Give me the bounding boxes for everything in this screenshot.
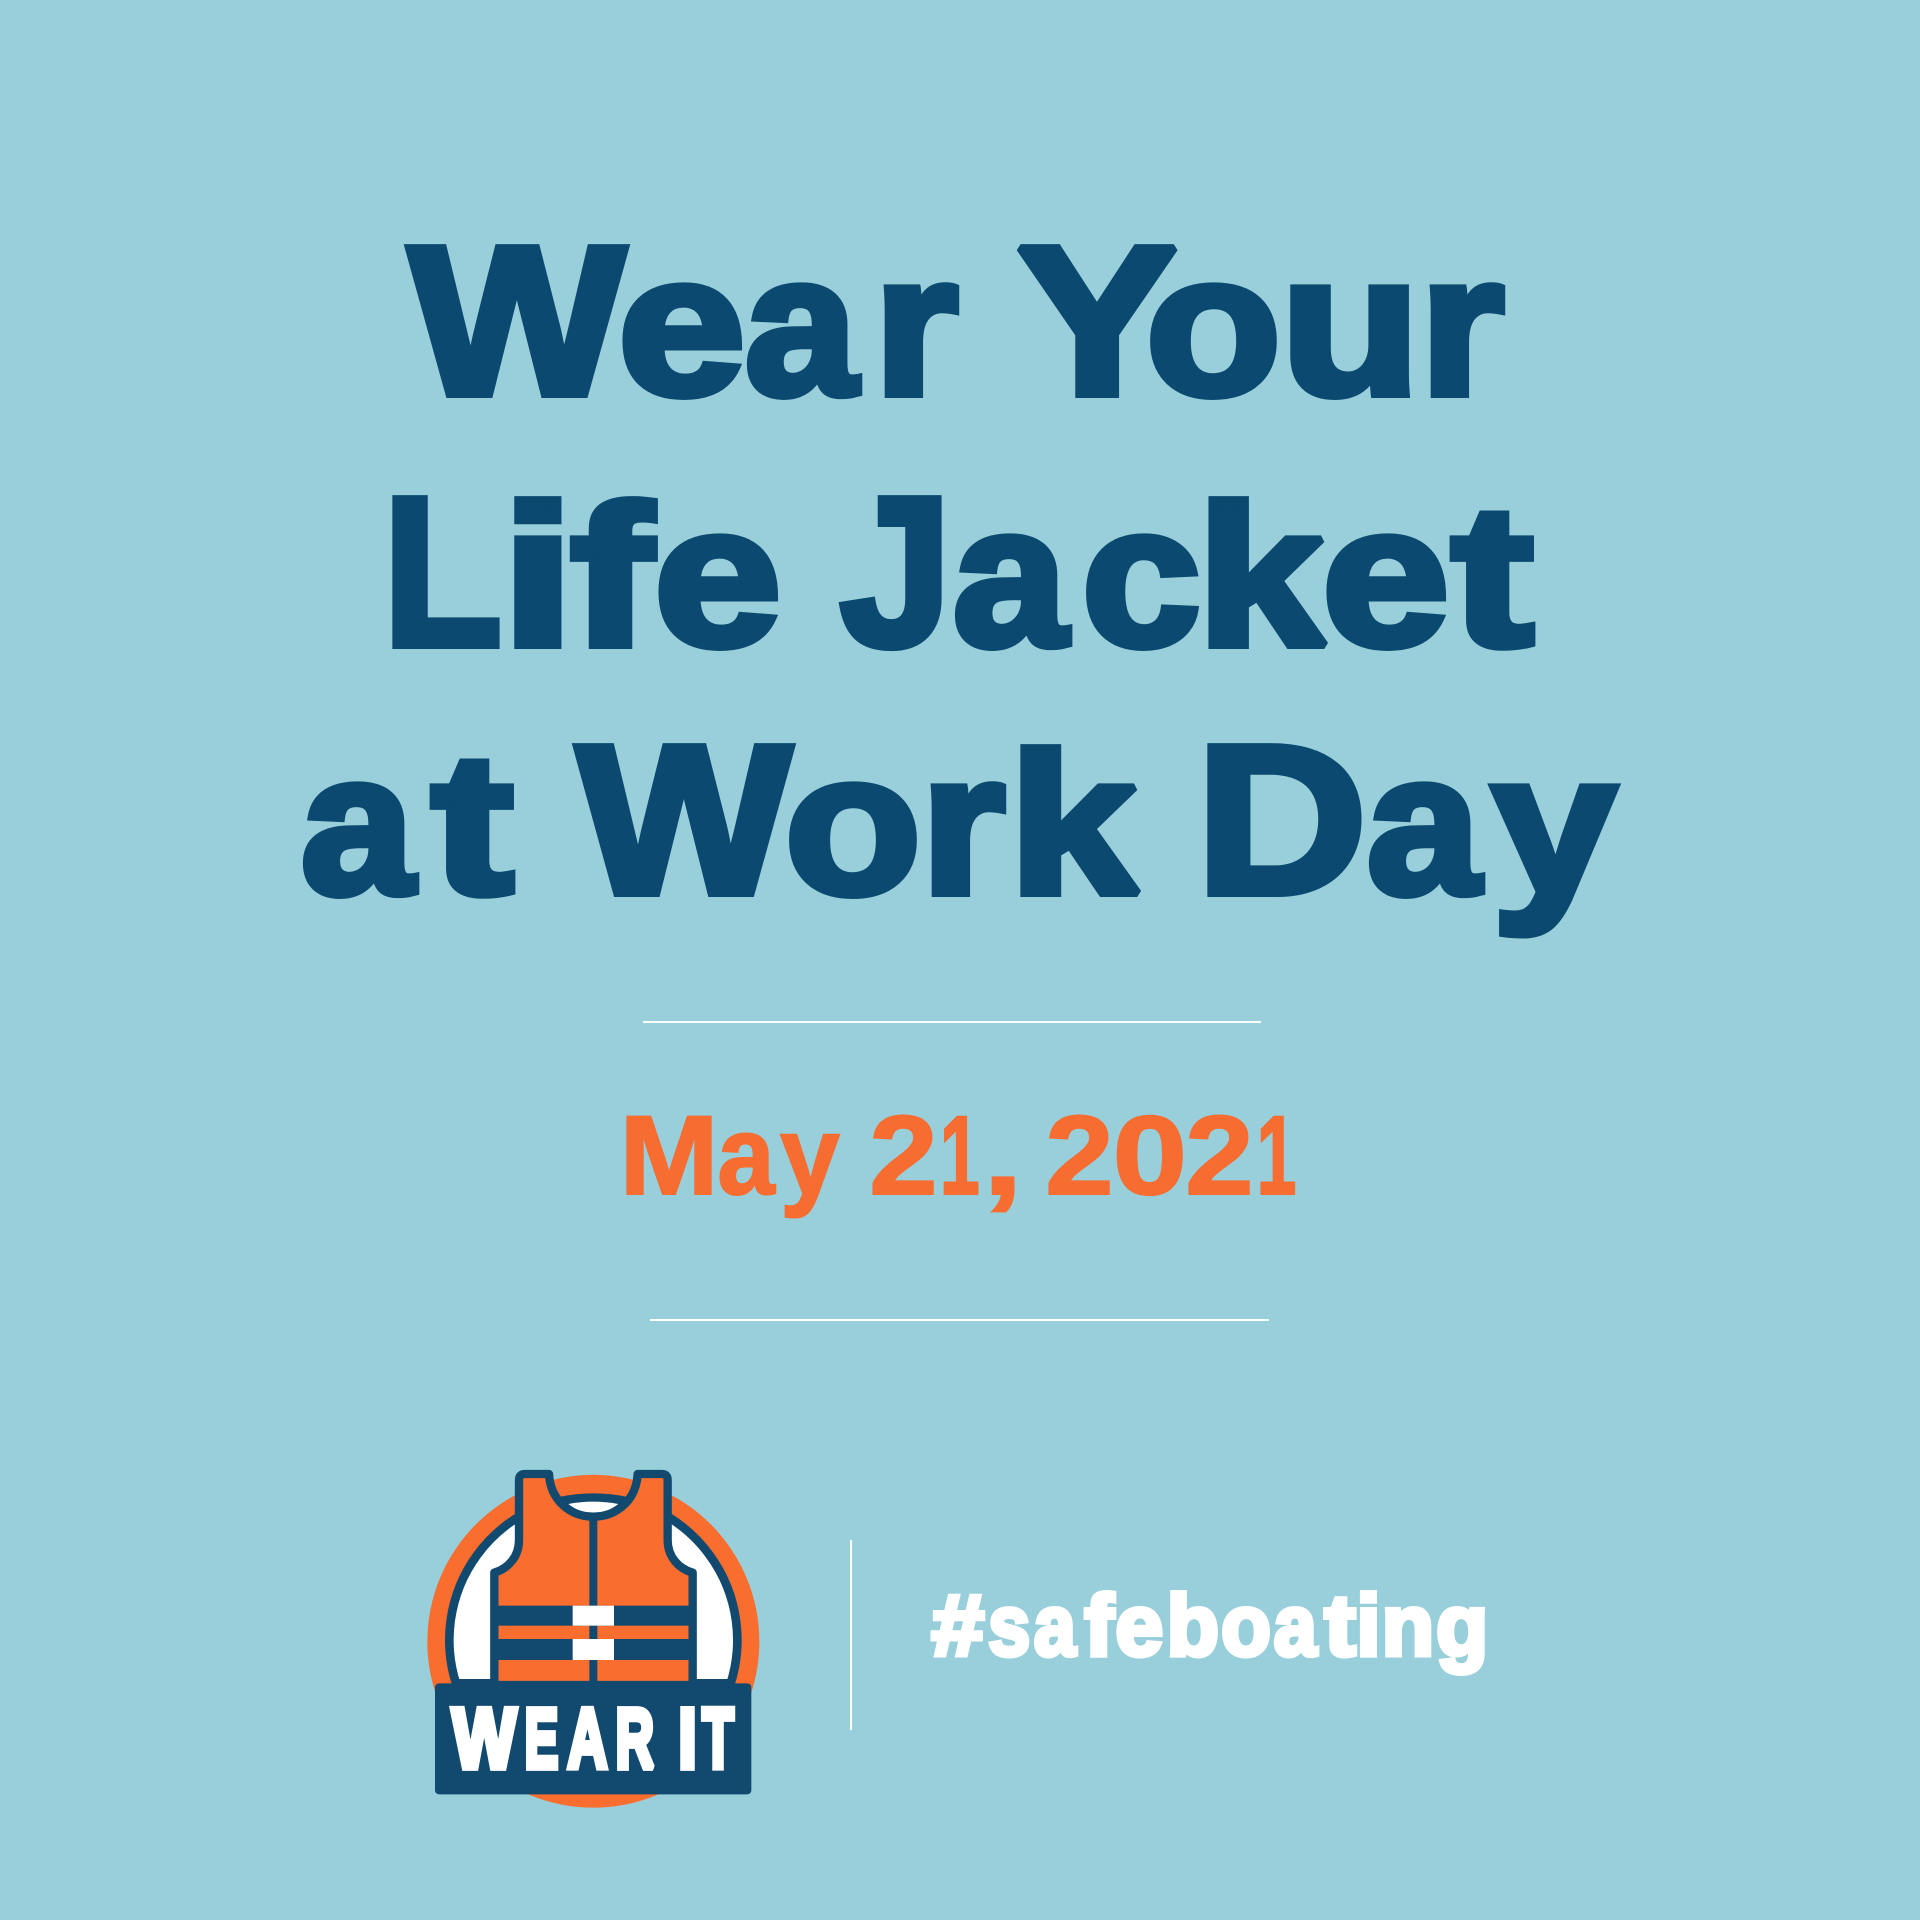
title: i xyxy=(501,465,575,688)
banner text: I xyxy=(678,1692,696,1786)
title xyxy=(301,202,1616,938)
title: a xyxy=(301,713,416,936)
logo: wear it life jacket badge xyxy=(427,1474,759,1808)
banner text: E xyxy=(525,1692,558,1786)
orange behind neck xyxy=(550,1475,637,1507)
title: J xyxy=(840,453,952,690)
title: t xyxy=(1452,465,1534,688)
title: r xyxy=(921,713,1005,936)
title: f xyxy=(570,465,653,688)
title: D xyxy=(1196,701,1367,938)
neck opening xyxy=(568,1502,618,1513)
date: 2 xyxy=(1045,1093,1114,1218)
title: L xyxy=(383,453,502,690)
hashtag: g xyxy=(1436,1578,1488,1674)
title: e xyxy=(654,465,781,688)
white buckles xyxy=(573,1606,614,1660)
hashtag: i xyxy=(1356,1578,1381,1674)
banner text: R xyxy=(616,1692,654,1786)
title: Y xyxy=(1016,202,1178,439)
date: , xyxy=(983,1093,1023,1218)
title: u xyxy=(1281,214,1420,437)
hashtag: o xyxy=(1221,1578,1271,1674)
title: r xyxy=(874,214,958,437)
date: 0 xyxy=(1113,1093,1187,1218)
date: a xyxy=(717,1093,775,1218)
title: o xyxy=(785,713,921,936)
title: r xyxy=(1420,214,1504,437)
banner text: T xyxy=(702,1692,734,1786)
title: a xyxy=(745,214,859,437)
hashtag: a xyxy=(1274,1578,1318,1674)
date: 2 xyxy=(869,1093,938,1218)
title: e xyxy=(618,214,745,437)
neck collar xyxy=(557,1493,630,1518)
navy straps xyxy=(497,1606,690,1660)
banner text: W xyxy=(452,1692,517,1786)
vest body xyxy=(494,1474,693,1685)
hashtag: # xyxy=(932,1578,984,1674)
hashtag: b xyxy=(1167,1578,1219,1674)
date: 2 xyxy=(1185,1093,1254,1218)
title: t xyxy=(432,713,514,936)
date: 1 xyxy=(940,1093,980,1218)
hashtag: e xyxy=(1116,1578,1163,1674)
hashtag: a xyxy=(1034,1578,1077,1674)
orange circle xyxy=(427,1476,759,1808)
zipper line xyxy=(589,1517,597,1685)
hashtag: s xyxy=(988,1578,1030,1674)
date: y xyxy=(780,1093,840,1218)
title: e xyxy=(1322,465,1449,688)
white arms with navy outline xyxy=(449,1496,737,1683)
title: y xyxy=(1492,713,1616,936)
title: a xyxy=(1367,713,1482,936)
hashtag: n xyxy=(1382,1578,1434,1674)
title: o xyxy=(1146,214,1281,437)
banner text: A xyxy=(568,1692,607,1786)
title: k xyxy=(1009,713,1138,936)
title: a xyxy=(953,465,1069,688)
title: W xyxy=(577,701,791,938)
title: k xyxy=(1197,465,1325,688)
title: W xyxy=(409,202,625,439)
date: 1 xyxy=(1256,1093,1296,1218)
banner xyxy=(435,1683,751,1794)
hashtag: f xyxy=(1085,1578,1114,1674)
hashtag: t xyxy=(1325,1578,1356,1674)
date: M xyxy=(620,1093,718,1218)
title: c xyxy=(1082,465,1200,688)
